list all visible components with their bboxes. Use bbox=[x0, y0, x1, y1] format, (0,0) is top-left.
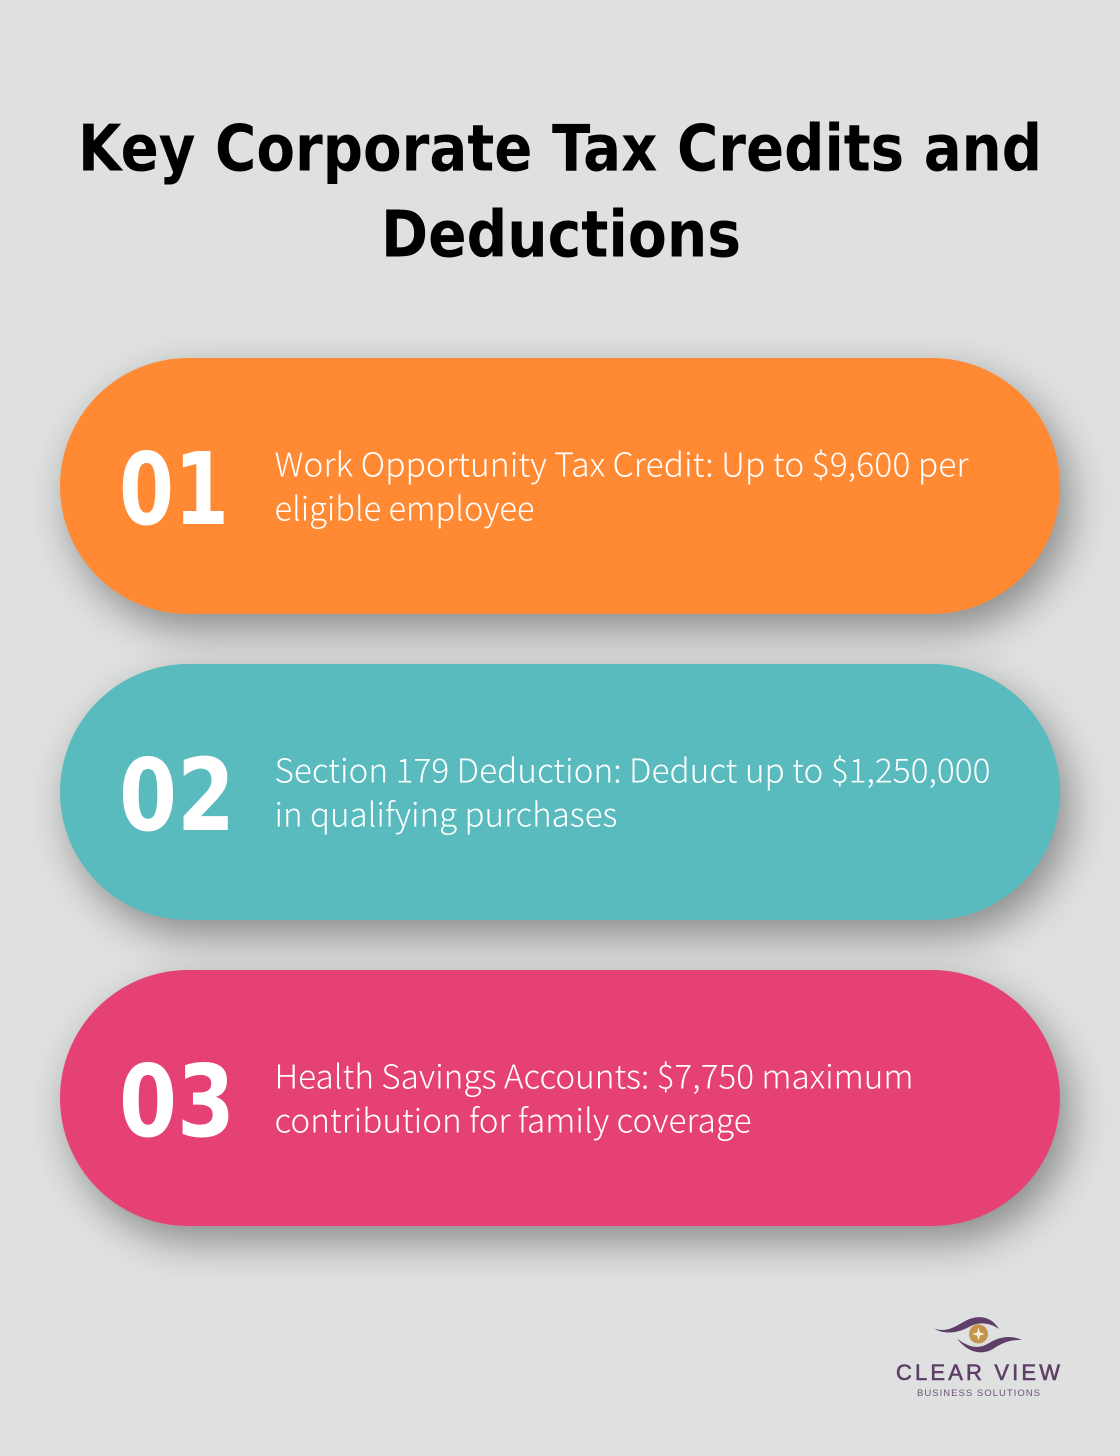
text: health savings accounts: contribution for family coverage bbox=[274, 1094, 752, 1142]
logo tagline: BUSINESS SOLUTIONS bbox=[917, 1388, 1040, 1399]
text: work opportunity tax credit bbox=[274, 438, 969, 530]
text: health savings accounts: Health Savings Accounts: $7,750 maximum bbox=[274, 1050, 914, 1098]
number 03: 03 bbox=[119, 1043, 235, 1160]
title bbox=[78, 112, 1042, 272]
title: Deductions bbox=[381, 198, 741, 272]
logo wordmark: CLEAR VIEW bbox=[896, 1360, 1060, 1385]
number 01: 01 bbox=[119, 431, 229, 548]
panel: orange card background bbox=[60, 358, 1060, 614]
icon: eye with gold star bbox=[934, 1317, 1022, 1352]
text: work opportunity tax credit: Work Opportunity Tax Credit: Up to $9,600 per bbox=[274, 438, 969, 486]
number 02: 02 bbox=[119, 737, 235, 854]
text: section 179 deduction bbox=[274, 744, 990, 836]
logo: clear view business solutions bbox=[896, 1317, 1060, 1399]
text: section 179 deduction: in qualifying purchases bbox=[274, 788, 618, 836]
text: section 179 deduction: Section 179 Deduction: Deduct up to $1,250,000 bbox=[274, 744, 990, 792]
panel: teal card background bbox=[60, 664, 1060, 920]
text: work opportunity tax credit: eligible employee bbox=[274, 482, 534, 530]
text: health savings accounts bbox=[274, 1050, 914, 1142]
panel: pink card background bbox=[60, 970, 1060, 1226]
